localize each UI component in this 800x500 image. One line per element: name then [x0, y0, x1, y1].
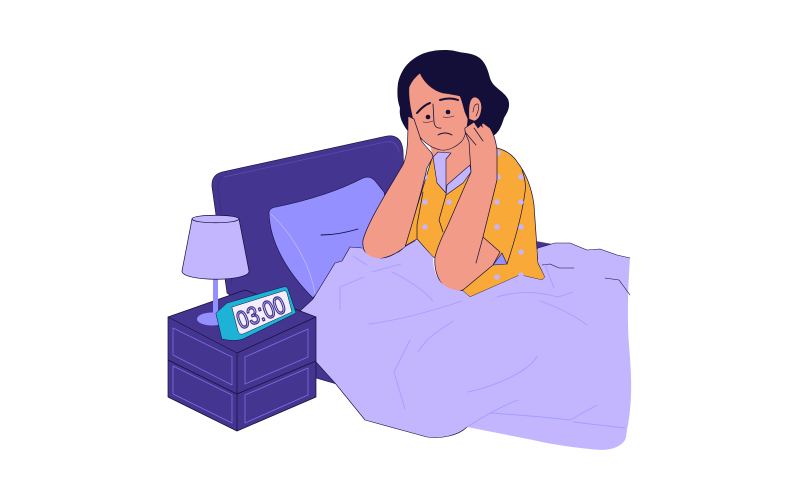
shirt polka dots — [422, 150, 524, 280]
pillow — [269, 177, 400, 298]
woman: collar — [433, 152, 471, 195]
eyebrows — [417, 103, 430, 113]
woman: left arm and hand — [363, 116, 433, 259]
blanket wrinkles — [340, 256, 625, 428]
nightstand — [168, 290, 316, 431]
woman: right arm and hand — [435, 118, 500, 292]
clock time: 03:00 — [233, 291, 289, 335]
woman: hair — [397, 50, 509, 140]
bed headboard and frame — [212, 136, 552, 385]
drawer panels — [173, 328, 308, 423]
lamp — [182, 215, 249, 326]
alarm clock — [216, 287, 296, 340]
ear — [469, 97, 482, 121]
eyes — [426, 115, 430, 119]
woman: shirt — [405, 148, 545, 297]
mouth — [438, 133, 452, 135]
woman: neck — [430, 135, 471, 195]
nose — [433, 104, 441, 128]
woman: face — [409, 73, 482, 150]
blanket — [300, 240, 631, 450]
